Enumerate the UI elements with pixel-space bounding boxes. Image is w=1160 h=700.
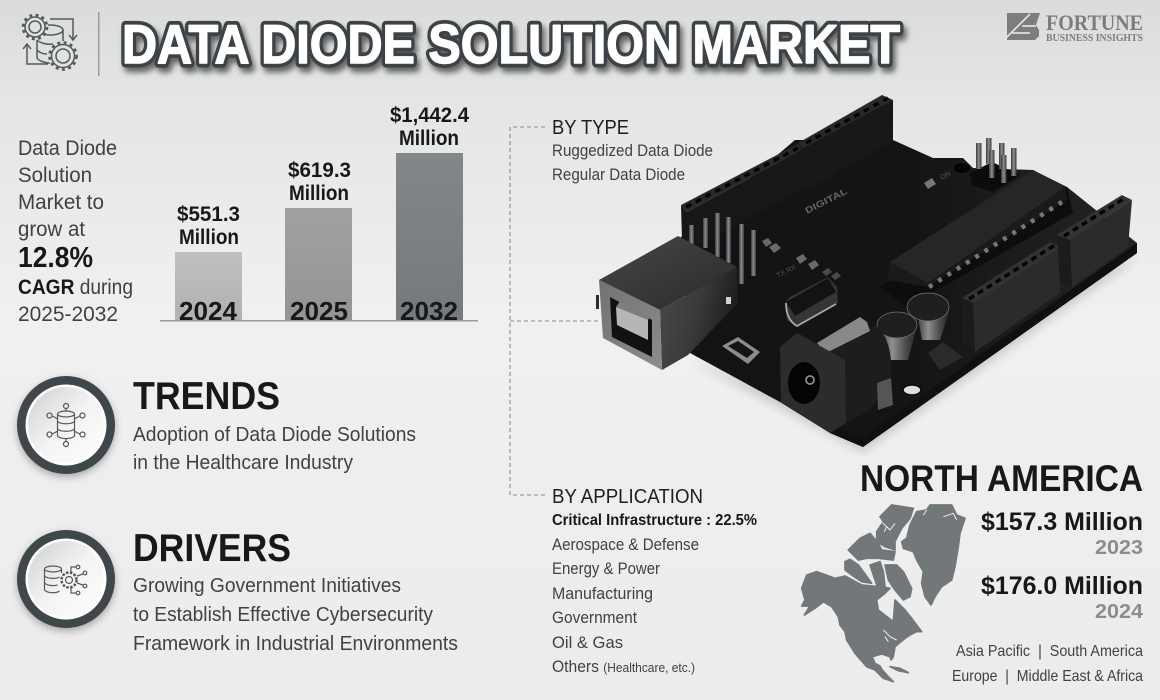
icon: database network — [17, 376, 115, 474]
text: application list: Critical Infrastructure : 22.5% — [552, 512, 757, 529]
panel: north america — [802, 458, 1144, 685]
mounting hole rear — [954, 163, 970, 173]
bar chart: market size — [160, 104, 478, 326]
bar: 2024: $551.3 — [177, 203, 240, 226]
jumper — [722, 337, 760, 364]
bar: 2025: 2025 — [290, 296, 348, 326]
stat: 2024: $176.0 Million — [981, 572, 1143, 600]
bar: 2025 — [285, 159, 352, 326]
board silkscreen — [776, 170, 952, 280]
text: type list — [552, 141, 713, 184]
logo: Fortune Business Insights — [1006, 10, 1143, 44]
text: type list: Regular Data Diode — [552, 165, 685, 184]
text block: CAGR summary: CAGR during — [18, 275, 133, 299]
text block: CAGR summary: grow at — [18, 217, 85, 241]
bar: 2024: Million — [179, 226, 239, 249]
text: drivers body — [133, 574, 458, 655]
bar: 2032 — [390, 104, 469, 326]
text: trends body: Adoption of Data Diode Solutions — [133, 423, 416, 446]
stat: 2023: 2023 — [1095, 537, 1143, 559]
text: application list: Energy & Power — [552, 559, 660, 578]
text: application list: Aerospace & Defense — [552, 535, 699, 554]
header divider — [98, 12, 100, 76]
text: application list: Others (Healthcare, etc.) — [552, 657, 695, 676]
text block: CAGR summary — [18, 136, 133, 326]
stat: 2024 — [981, 572, 1144, 623]
board silkscreen: DIGITAL — [803, 186, 849, 216]
rear header left — [681, 144, 808, 250]
text: other regions — [952, 643, 1143, 685]
title: DATA DIODE SOLUTION MARKET — [122, 13, 900, 75]
crystal — [785, 277, 838, 327]
dc jack — [780, 317, 921, 433]
connector: dashed segmentation lines — [510, 127, 598, 495]
capacitor front — [877, 312, 917, 360]
heading: by type: BY TYPE — [552, 116, 629, 139]
switch — [928, 342, 963, 370]
text: trends body: in the Healthcare Industry — [133, 451, 354, 474]
heading: trends: TRENDS — [133, 375, 280, 418]
right header front — [962, 242, 1062, 352]
board silkscreen: ON — [940, 170, 952, 182]
stat: 2024: 2024 — [1095, 601, 1144, 623]
panel: by type — [552, 116, 713, 184]
panel: trends — [17, 375, 416, 474]
pcb — [681, 140, 1137, 447]
bar: 2032: 2032 — [400, 296, 458, 326]
text: other regions: Asia Pacific | South America — [956, 643, 1143, 660]
title: DATA DIODE SOLUTION MARKET — [122, 13, 900, 75]
text block: CAGR summary: Solution — [18, 163, 92, 187]
bar: 2032: Million — [399, 127, 459, 150]
text block: CAGR summary: 12.8% — [18, 242, 93, 274]
logo: Fortune Business Insights: FORTUNE — [1046, 10, 1143, 35]
bar: 2025: $619.3 — [288, 159, 351, 182]
text: drivers body: to Establish Effective Cybersecurity — [133, 603, 434, 626]
text: application list: Government — [552, 608, 637, 627]
right header rear — [1057, 195, 1132, 287]
text: drivers body: Framework in Industrial Environments — [133, 632, 458, 655]
icon: database and gear — [17, 530, 115, 628]
text: application list — [552, 512, 757, 676]
usb port — [596, 236, 738, 370]
text block: CAGR summary: 2025-2032 — [18, 302, 118, 326]
bar: 2025: Million — [289, 182, 349, 205]
heading: by application: BY APPLICATION — [552, 485, 703, 508]
board silkscreen: TX RX — [776, 264, 798, 280]
illustration: circuit board — [596, 95, 1140, 452]
rear header right — [798, 95, 893, 190]
text block: CAGR summary: Market to — [18, 190, 104, 214]
bar: 2032: $1,442.4 — [390, 104, 469, 127]
panel: drivers — [17, 527, 458, 655]
heading: drivers: DRIVERS — [133, 527, 291, 570]
stat: 2023 — [981, 508, 1143, 559]
text: application list: Manufacturing — [552, 584, 653, 603]
icon: data cycle with gears — [22, 14, 78, 71]
text: type list: Ruggedized Data Diode — [552, 141, 713, 160]
logo: Fortune Business Insights: BUSINESS INSIGHTS — [1046, 33, 1143, 44]
capacitor rear — [907, 293, 949, 340]
map: north america — [802, 505, 965, 682]
bar: 2024: 2024 — [179, 296, 238, 326]
text: trends body — [133, 423, 416, 474]
text: drivers body: Growing Government Initiatives — [133, 574, 401, 597]
board pins — [689, 213, 756, 284]
panel: by application — [552, 485, 757, 676]
bar: 2024 — [175, 203, 242, 326]
stat: 2023: $157.3 Million — [981, 508, 1143, 536]
pin header — [970, 138, 1020, 192]
board leds — [762, 178, 936, 280]
ic chip — [880, 170, 1073, 307]
text block: CAGR summary: Data Diode — [18, 136, 117, 160]
board shadow — [690, 256, 1140, 452]
text: application list: Oil & Gas — [552, 633, 623, 652]
